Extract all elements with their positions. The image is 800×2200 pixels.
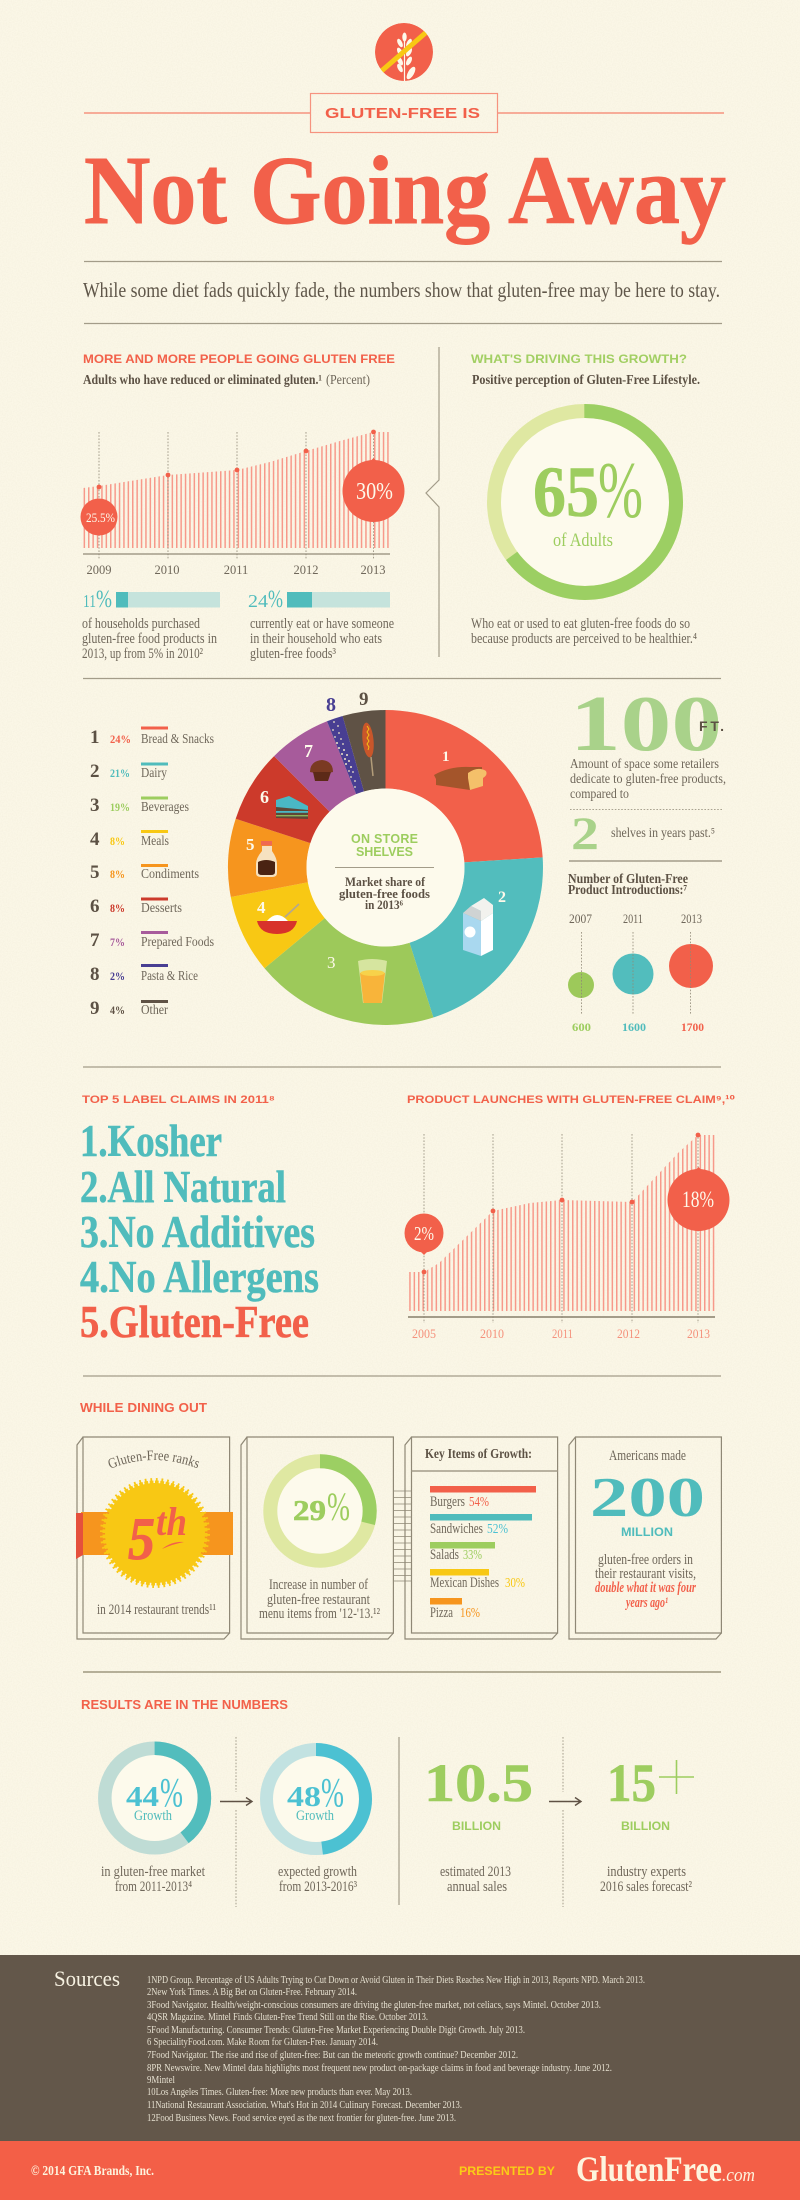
segment numbers: 6 [260, 787, 269, 807]
card: 29% menu items: gluten-free restaurant [267, 1592, 371, 1608]
stat: 24% households: 24 [248, 591, 268, 611]
legend: market share: 9 [90, 998, 100, 1019]
bar chart: growth items: Pizza [430, 1605, 453, 1621]
footer [0, 2141, 800, 2200]
card: key items of growth: Key Items of Growth: [425, 1446, 532, 1461]
chart: 65% donut [494, 411, 676, 593]
stat: 44% growth: in gluten-free market [101, 1864, 206, 1880]
legend: market share: 8% [110, 869, 125, 881]
segment numbers [246, 689, 506, 972]
panel: shelf space [568, 681, 726, 1034]
copyright: © 2014 GFA Brands, Inc. [31, 2163, 154, 2178]
legend: market share: 6 [90, 896, 100, 917]
arrow [549, 1798, 581, 1806]
eyebrow heading [84, 94, 724, 132]
heading: TOP 5 LABEL CLAIMS IN 2011⁸ [82, 1094, 275, 1106]
center label: Market share of [345, 875, 426, 889]
subheading: Adults who have reduced or eliminated gluten.¹ [83, 372, 322, 387]
legend: market share: 5 [90, 862, 100, 883]
stat: 44% growth [101, 1748, 206, 1895]
chart: introductions bubbles: 2007 [569, 912, 592, 926]
legend: market share: 7% [110, 937, 125, 949]
callout: 25.5%: 25.5% [86, 510, 115, 525]
segment numbers: 8 [326, 694, 336, 716]
panel: what's driving this growth [471, 354, 700, 647]
source list: 8PR Newswire. New Mintel data highlights most frequent new product on-package claims in food and beverage industry. June 2012. [147, 2062, 612, 2074]
stat: 44% growth: Growth [134, 1808, 172, 1824]
callout: 2% [404, 1214, 444, 1255]
callout: 2%: 2% [414, 1223, 434, 1245]
source list: 9Mintel [147, 2074, 175, 2086]
arched text [110, 1460, 199, 1469]
legend: market share: 7 [90, 930, 100, 951]
stat: 48% growth: % [321, 1769, 344, 1815]
source list: 4QSR Magazine. Mintel Finds Gluten-Free Trend Still on the Rise. October 2013. [147, 2011, 428, 2023]
years axis: 2010 [154, 563, 180, 577]
stat: 48% growth [266, 1750, 366, 1895]
stat: 44% growth: from 2011-2013⁴ [115, 1879, 192, 1895]
legend: market share: 4 [90, 829, 100, 850]
icon: muffin [310, 760, 333, 781]
stat: 11% households: 11 [83, 591, 96, 611]
chart: market share donut [228, 689, 543, 1025]
ranked list: 5.Gluten-Free [80, 1297, 309, 1347]
legend: market share: 21% [110, 768, 130, 780]
stat: 100 ft: FT. [699, 718, 724, 734]
card: 200 million orders: their restaurant visits, [595, 1566, 696, 1582]
chart: 65% donut: of Adults [553, 530, 613, 551]
chart: launches area [404, 1133, 730, 1341]
years axis: 2011 [552, 1327, 573, 1341]
legend: market share: Bread & Snacks [141, 731, 214, 746]
stat: 10.5 billion: BILLION [452, 1821, 501, 1833]
legend: market share: Meals [141, 833, 169, 848]
heading: results are in the numbers: RESULTS ARE IN THE NUMBERS [81, 1698, 288, 1712]
chart: adults percent area [80, 430, 404, 577]
source list [147, 1974, 645, 2124]
years axis: 2009 [86, 563, 112, 577]
legend: market share: 2% [110, 971, 125, 983]
legend: market share: 4% [110, 1005, 125, 1017]
years axis: 2012 [294, 563, 318, 577]
icon: milk carton [463, 898, 493, 956]
heading: MORE AND MORE PEOPLE GOING GLUTEN FREE [83, 354, 395, 366]
source list: 11National Restaurant Association. What's Hot in 2014 Culinary Forecast. December 2013. [147, 2099, 462, 2111]
center label: ON STORE [351, 832, 418, 846]
heading: while dining out: WHILE DINING OUT [80, 1401, 207, 1415]
callout: 30%: 30% [356, 479, 393, 505]
badge: 5th: 5 [128, 1506, 155, 1572]
stat: 24% households [248, 586, 394, 662]
panel: sources [0, 1955, 800, 2141]
ranked list: 1.Kosher [80, 1116, 222, 1166]
card: 200 million orders: years ago¹ [625, 1595, 668, 1611]
badge: 5th: th [156, 1499, 187, 1544]
chart: 29% donut [270, 1461, 370, 1561]
text: perceived healthier [471, 616, 697, 647]
chart: introductions bubbles: 2013 [681, 912, 702, 926]
segment numbers: 1 [442, 749, 450, 765]
source list: 5Food Manufacturing. Consumer Trends: Gluten-Free Market Experiencing Double Digit Growth. July 2013. [147, 2024, 525, 2036]
card: restaurant trends [76, 1436, 233, 1640]
center label [335, 832, 434, 912]
segment numbers: 7 [304, 741, 313, 761]
bar chart: growth items: 52% [487, 1522, 508, 1537]
legend: market share: 8% [110, 903, 125, 915]
card: 200 million orders: Americans made [609, 1448, 686, 1464]
ranked list: 3.No Additives [80, 1207, 315, 1257]
legend: market share: 2 [90, 761, 100, 782]
bar chart: growth items: 54% [469, 1495, 489, 1510]
bar chart: growth items: Sandwiches [430, 1521, 483, 1537]
stat: 11% households: gluten-free food products in [82, 631, 217, 647]
chart: introductions bubbles: 2011 [623, 912, 643, 926]
stat: 48% growth: from 2013-2016³ [279, 1879, 357, 1895]
text: retailer space: compared to [570, 786, 629, 801]
stat: 2 shelves [571, 808, 715, 860]
ranked list [80, 1116, 319, 1347]
stat: 2 shelves: shelves in years past.⁵ [611, 825, 715, 840]
callout: 18% [668, 1167, 730, 1231]
segment numbers: 2 [498, 889, 506, 906]
text: perceived healthier: because products are perceived to be healthier.⁴ [471, 631, 697, 647]
icon: corn dog [361, 722, 375, 776]
ribbon [76, 1512, 233, 1559]
chart: 29% donut: % [327, 1484, 350, 1529]
stat: 11% households: 2013, up from 5% in 2010² [82, 646, 203, 662]
icon: rice bowl [257, 904, 299, 934]
years axis: 2013 [360, 563, 386, 577]
heading: WHAT'S DRIVING THIS GROWTH? [471, 354, 687, 366]
center label: SHELVES [356, 845, 413, 859]
source list: 1NPD Group. Percentage of US Adults Trying to Cut Down or Avoid Gluten in Their Diets Reaches New High in 2013, Reports NPD. March 2013. [147, 1974, 645, 1986]
bar chart: growth items: Mexican Dishes [430, 1575, 499, 1591]
stat: 24% households: gluten-free foods³ [250, 646, 336, 662]
chart: 65% donut: 65 [533, 452, 599, 532]
legend: market share: Other [141, 1002, 168, 1017]
legend: market share: Prepared Foods [141, 934, 214, 949]
stat: 48% growth: 48 [287, 1781, 321, 1813]
legend: market share: Desserts [141, 900, 182, 915]
badge: 5th [102, 1480, 208, 1586]
stat: 15+ billion: 2016 sales forecast² [600, 1879, 692, 1895]
card: 29% menu items: Increase in number of [269, 1577, 368, 1593]
segment numbers: 5 [246, 835, 254, 854]
chart: introductions bubbles: 1600 [622, 1020, 646, 1034]
heading: product introductions: Product Introductions:⁷ [568, 882, 687, 897]
text: retailer space: dedicate to gluten-free products, [570, 771, 726, 786]
card: 200 million orders [569, 1437, 721, 1639]
legend: market share: Condiments [141, 866, 199, 881]
card: 29% menu items [241, 1437, 393, 1639]
stat: 24% households: in their household who eats [250, 631, 382, 647]
stat: 100 ft: 100 [570, 681, 722, 768]
stat: 24% households: % [268, 586, 283, 613]
years axis: 2013 [687, 1327, 710, 1341]
callout: 30% [342, 458, 404, 522]
bar chart: growth items: 30% [505, 1576, 525, 1591]
bar chart: growth items: 33% [463, 1548, 482, 1563]
subheading: Positive perception of Gluten-Free Lifestyle. [472, 372, 700, 387]
ranked list: 4.No Allergens [80, 1252, 319, 1302]
logo: GlutenFree [576, 2149, 722, 2189]
bar chart: growth items: Salads [430, 1547, 459, 1563]
stat: 11% households: of households purchased [82, 616, 200, 632]
card: restaurant trends: Gluten-Free ranks [108, 1450, 200, 1468]
years axis [86, 563, 386, 577]
chart: introductions bubbles [568, 912, 713, 1034]
arrow [220, 1798, 252, 1806]
title: Not Going Away [84, 137, 726, 245]
card: restaurant trends: in 2014 restaurant trends¹¹ [97, 1602, 216, 1618]
center label: gluten-free foods [339, 887, 430, 901]
callout: 25.5% [80, 498, 118, 536]
source list: 6 SpecialityFood.com. Make Room for Gluten-Free. January 2014. [147, 2036, 378, 2048]
legend: market share: 8 [90, 964, 100, 985]
years axis: 2010 [480, 1327, 504, 1341]
heading: PRODUCT LAUNCHES WITH GLUTEN-FREE CLAIM⁹,¹⁰ [407, 1094, 735, 1106]
bar chart: growth items [430, 1486, 536, 1621]
years axis: 2005 [412, 1327, 436, 1341]
stat: 44% growth: % [160, 1769, 183, 1815]
card: 29% menu items: menu items from '12-'13.¹² [259, 1606, 380, 1622]
segment numbers: 4 [257, 898, 266, 917]
card: key items of growth [405, 1437, 558, 1639]
icon: rice speckles [332, 721, 356, 788]
stat: 10.5 billion [424, 1753, 533, 1895]
callout: 18%: 18% [682, 1187, 714, 1212]
stat: 10.5 billion: annual sales [447, 1879, 507, 1895]
source list: 12Food Business News. Food service eyed as the next frontier for gluten-free. June 2013. [147, 2112, 456, 2124]
legend: market share: 8% [110, 836, 125, 848]
panel: product launches [404, 1094, 735, 1341]
icon: sauce bottle [256, 841, 277, 877]
source list: 7Food Navigator. The rise and rise of gluten-free: But can the meteoric growth continue? December 2012. [147, 2049, 518, 2061]
stat: 10.5 billion: 10.5 [424, 1753, 533, 1813]
logo: .com [722, 2165, 755, 2186]
center label: in 2013⁶ [365, 898, 403, 912]
stat: 11% households: % [96, 586, 112, 613]
stat: 24% households: currently eat or have someone [250, 616, 394, 632]
stat: 15+ billion: 15 [607, 1753, 656, 1813]
stat: 15+ billion [600, 1753, 694, 1895]
icon: layered cake [276, 796, 308, 819]
stat: 15+ billion: industry experts [607, 1864, 686, 1880]
chart: introductions bubbles: 600 [572, 1020, 591, 1034]
legend: market share: Dairy [141, 765, 167, 780]
icon: crossed out wheat [375, 23, 433, 82]
years axis [412, 1327, 710, 1341]
source list: 10Los Angeles Times. Gluten-free: More new products than ever. May 2013. [147, 2086, 412, 2098]
years axis: 2012 [617, 1327, 640, 1341]
card: 200 million orders: MILLION [621, 1527, 673, 1539]
segment numbers: 3 [327, 953, 336, 972]
chart: 65% donut: % [598, 447, 643, 535]
card: 200 million orders: gluten-free orders in [598, 1552, 693, 1568]
source list: 3Food Navigator. Health/weight-conscious consumers are driving the gluten-free market, not celiacs, says Mintel. October 2013. [147, 1999, 601, 2011]
legend: market share: 24% [110, 734, 131, 746]
text: retailer space [570, 756, 726, 801]
panel: top 5 label claims [80, 1094, 319, 1347]
bar chart: growth items: 16% [460, 1606, 480, 1621]
stat: 11% households [82, 586, 220, 662]
card: 200 million orders: 200 [590, 1467, 705, 1529]
bar chart: growth items: Burgers [430, 1494, 465, 1510]
years axis: 2011 [224, 563, 248, 577]
subheading: (Percent) [326, 372, 370, 387]
legend: market share [90, 726, 214, 1019]
card: 200 million orders: double what it was four [595, 1580, 696, 1596]
legend: market share: 1 [90, 727, 100, 748]
source list: 2New York Times. A Big Bet on Gluten-Free. February 2014. [147, 1986, 357, 1998]
legend: market share: 3 [90, 795, 100, 816]
heading: product introductions [568, 871, 688, 897]
text: perceived healthier: Who eat or used to eat gluten-free foods do so [471, 616, 690, 632]
icon: juice glass [358, 959, 387, 1003]
stat: 44% growth: 44 [126, 1781, 159, 1813]
chart: 29% donut: 29 [293, 1495, 326, 1527]
panel: more people going gluten free [80, 354, 404, 662]
ranked list: 2.All Natural [80, 1162, 286, 1212]
stat: 48% growth: Growth [296, 1808, 334, 1824]
eyebrow heading: GLUTEN-FREE IS [325, 106, 480, 122]
legend: market share: Beverages [141, 799, 189, 814]
stat: 48% growth: expected growth [278, 1864, 357, 1880]
presented by: PRESENTED BY [459, 2164, 555, 2178]
heading: product introductions: Number of Gluten-Free [568, 871, 688, 886]
segment numbers: 9 [359, 689, 368, 710]
legend: market share: 19% [110, 802, 130, 814]
chart: introductions bubbles: 1700 [681, 1020, 704, 1034]
stat: 10.5 billion: estimated 2013 [440, 1864, 511, 1880]
legend: market share: Pasta & Rice [141, 968, 198, 983]
icon: bread [434, 767, 487, 790]
text: retailer space: Amount of space some retailers [570, 756, 719, 771]
stat: 15+ billion: BILLION [621, 1821, 670, 1833]
stat: 2 shelves: 2 [571, 808, 599, 860]
heading: Sources [54, 1966, 120, 1991]
